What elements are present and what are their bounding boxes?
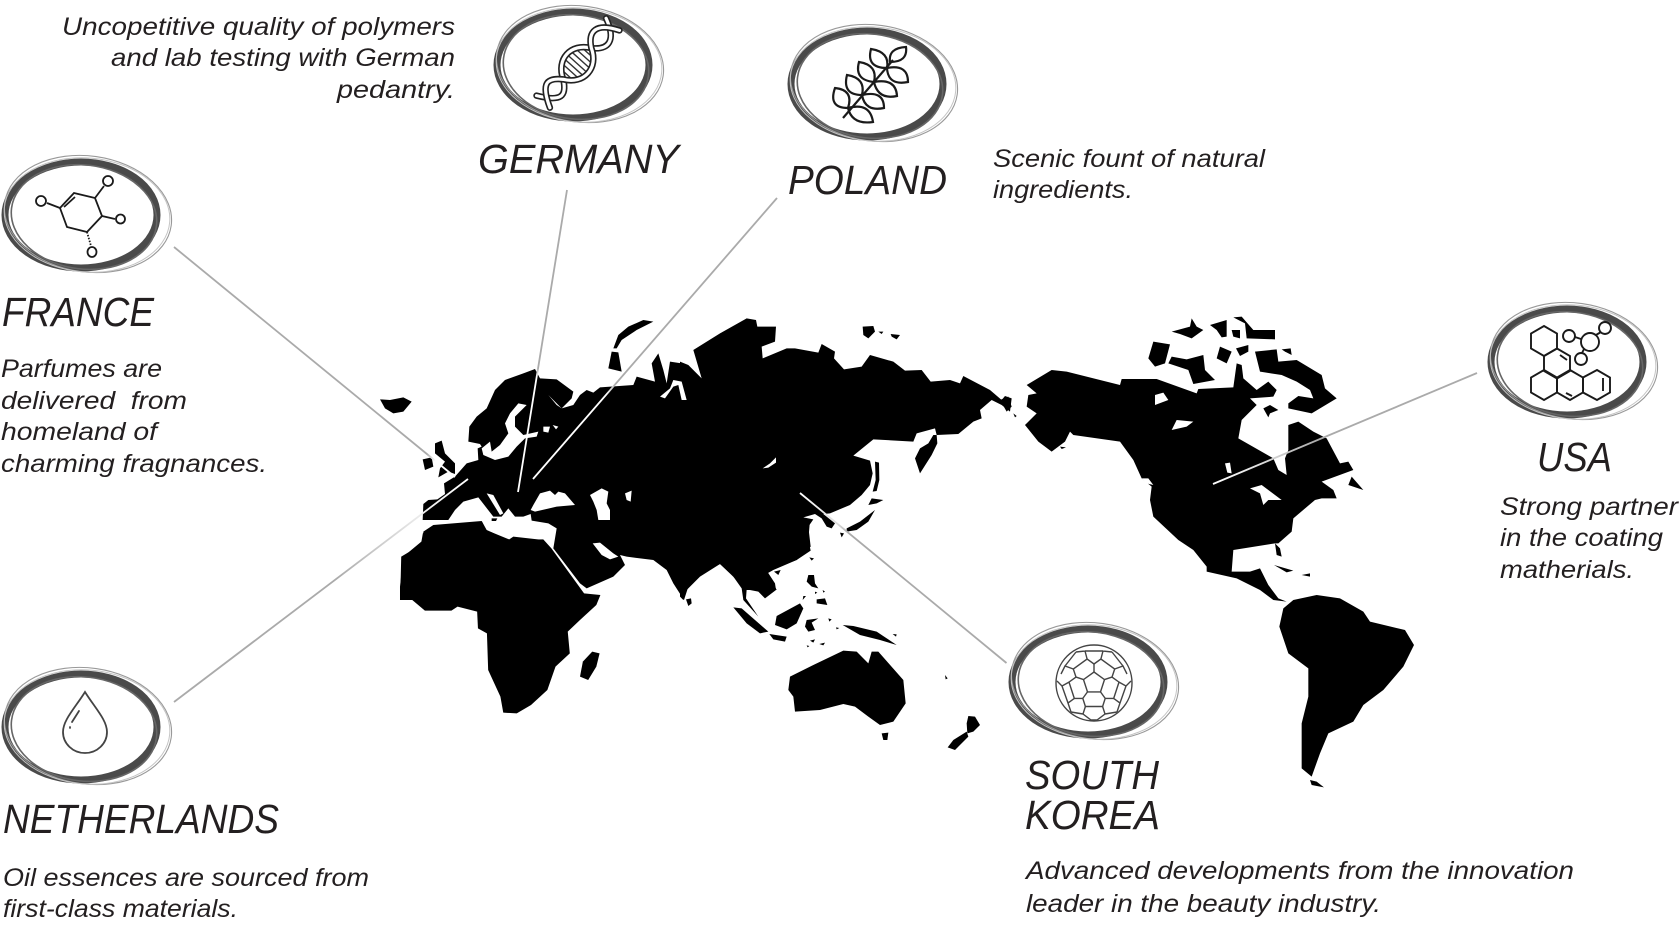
icon: South Korea fullerene xyxy=(1004,612,1186,750)
map: Europe and western Asia xyxy=(380,320,700,600)
map: sea cut-outs xyxy=(482,380,776,559)
text: USA description: Strong partner xyxy=(1500,493,1680,521)
text: Germany description: pedantry. xyxy=(336,76,455,104)
panel: Poland xyxy=(783,14,1267,204)
heading: Netherlands: NETHERLANDS xyxy=(3,796,279,842)
text: USA description: in the coating xyxy=(1500,524,1663,552)
heading: Germany: GERMANY xyxy=(478,136,682,182)
heading: USA: USA xyxy=(1537,434,1612,480)
text: Poland description xyxy=(993,145,1267,204)
text: Netherlands description: Oil essences are sourced from xyxy=(3,864,369,892)
text: France description xyxy=(1,355,267,478)
heading: South Korea: KOREA xyxy=(1025,792,1160,838)
icon: Poland wheat xyxy=(783,14,965,152)
line: France xyxy=(174,247,455,477)
map: south America xyxy=(1000,397,1414,787)
map: Australia xyxy=(788,651,906,725)
icon: Germany DNA helix xyxy=(489,0,671,133)
text: South Korea description: leader in the beauty industry. xyxy=(1026,890,1381,918)
panel: South Korea xyxy=(1004,612,1574,918)
text: France description: Parfumes are xyxy=(1,355,162,383)
panel: USA xyxy=(1483,292,1680,584)
line: USA xyxy=(1213,373,1477,484)
heading: South Korea: SOUTH xyxy=(1025,752,1159,798)
world map xyxy=(380,317,1414,787)
panel: Germany xyxy=(62,0,682,182)
line: Netherlands xyxy=(174,479,468,702)
text: Germany description: Uncopetitive quality of polymers xyxy=(62,13,455,41)
heading: France: FRANCE xyxy=(2,289,155,335)
text: South Korea description xyxy=(1024,857,1574,918)
text: USA description: matherials. xyxy=(1500,556,1634,584)
text: Poland description: ingredients. xyxy=(993,176,1133,204)
text: France description: charming fragnances. xyxy=(1,450,267,478)
text: Poland description: Scenic fount of natural xyxy=(993,145,1267,173)
text: Germany description xyxy=(62,13,455,104)
text: Netherlands description xyxy=(3,864,369,923)
text: Netherlands description: first-class materials. xyxy=(3,895,238,923)
heading: South Korea xyxy=(1025,752,1160,838)
line: South Korea xyxy=(800,493,1006,663)
map: southern Africa and Madagascar xyxy=(400,522,600,713)
heading: Poland: POLAND xyxy=(788,157,947,203)
line: Poland xyxy=(533,198,777,479)
line: Germany xyxy=(518,190,567,492)
text: France description: homeland of xyxy=(1,418,160,446)
text: France description: delivered from xyxy=(1,387,187,415)
map: north America xyxy=(1025,317,1363,602)
panel: Netherlands xyxy=(0,657,369,923)
icon: Netherlands oil drop xyxy=(0,657,179,795)
text: Germany description: and lab testing with German xyxy=(111,44,455,72)
icon: France molecule xyxy=(0,145,179,283)
text: USA description xyxy=(1500,493,1680,584)
icon: USA polycyclic molecule xyxy=(1483,292,1665,430)
map: south-east Asia and Oceania xyxy=(680,520,980,750)
text: South Korea description: Advanced developments from the innovation xyxy=(1024,857,1574,885)
map: north and east Asia xyxy=(680,318,1017,590)
panel: France xyxy=(0,145,267,478)
connector lines xyxy=(174,190,1477,702)
